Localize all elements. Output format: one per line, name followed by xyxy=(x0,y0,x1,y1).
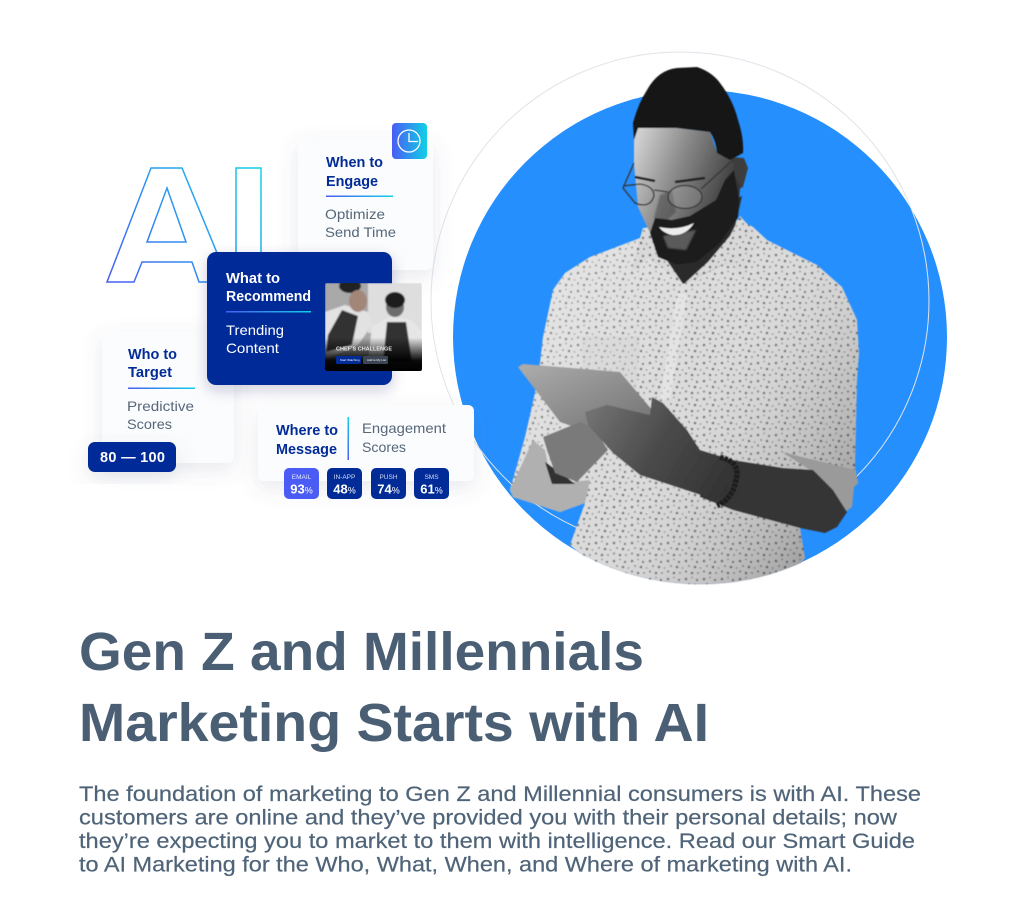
description paragraph: they’re expecting you to market to them with intelligence. Read our Smart Guide xyxy=(79,830,915,853)
heading: What to xyxy=(226,271,280,287)
channel tile: email xyxy=(284,468,319,499)
card: who to target xyxy=(102,331,234,463)
body line two: Scores xyxy=(127,416,172,432)
channel tile: sms: SMS xyxy=(424,474,439,481)
left forearm and cuff xyxy=(510,440,590,512)
lens right xyxy=(668,186,702,208)
content thumbnail: chef's challenge xyxy=(325,279,422,371)
description paragraph: The foundation of marketing to Gen Z and Millennial consumers is with AI. These xyxy=(79,783,921,806)
channel tile: in-app: IN-APP xyxy=(334,474,355,481)
left chef xyxy=(325,305,372,360)
card: where to message xyxy=(258,405,474,481)
heading line two: Target xyxy=(128,365,172,381)
card: what to recommend xyxy=(207,252,392,385)
channel tile: in-app xyxy=(327,468,362,499)
lens left xyxy=(623,163,654,205)
description paragraph: to AI Marketing for the Who, What, When, and Where of marketing with AI. xyxy=(79,854,852,876)
card background xyxy=(102,331,234,463)
button: add to my list: Add to My List xyxy=(367,358,386,362)
tablet xyxy=(518,364,664,436)
placket xyxy=(660,293,687,400)
chin highlight xyxy=(663,230,696,250)
thumbnail title: CHEF’S CHALLENGE xyxy=(336,346,392,352)
icon: clock xyxy=(392,123,427,159)
body line two: Content xyxy=(226,340,279,356)
face xyxy=(634,128,740,265)
thin outline circle xyxy=(431,52,929,550)
body: Engagement xyxy=(362,420,446,436)
right collar xyxy=(685,216,760,283)
AI outline lettering xyxy=(107,168,261,282)
bracelet xyxy=(717,457,737,506)
beard xyxy=(650,170,739,265)
channel tile: sms: 61% xyxy=(420,482,443,496)
hair xyxy=(633,67,743,160)
letter A xyxy=(107,168,229,282)
nose shadow xyxy=(654,190,676,222)
letter I xyxy=(236,168,261,282)
blue circle backdrop xyxy=(453,90,947,584)
bottom fade xyxy=(325,338,422,371)
card: when to engage xyxy=(298,138,433,270)
channel tile: push xyxy=(371,468,406,499)
body: Trending xyxy=(226,322,284,338)
heading: Who to xyxy=(128,347,177,363)
temple arm xyxy=(654,160,733,192)
score range badge: 80 — 100 xyxy=(100,450,165,466)
body line two: Scores xyxy=(362,439,406,455)
glasses xyxy=(623,160,733,208)
card background xyxy=(298,138,433,270)
cuff on right sleeve xyxy=(782,452,858,512)
right hand xyxy=(585,397,728,497)
card background xyxy=(207,252,392,385)
title line one: Gen Z and Millennials xyxy=(79,622,644,682)
score range badge xyxy=(88,442,176,472)
heading line two: Recommend xyxy=(226,289,311,305)
channel tile: email: EMAIL xyxy=(292,474,312,481)
shirt xyxy=(510,220,859,590)
ear xyxy=(728,157,748,191)
channel tile: push: 74% xyxy=(377,482,400,496)
photo background xyxy=(325,279,422,371)
body: Predictive xyxy=(127,398,194,414)
title xyxy=(79,622,709,753)
button: start watching: Start Watching xyxy=(340,358,360,362)
heading: When to xyxy=(326,155,383,171)
chest pocket xyxy=(583,336,639,386)
description paragraph xyxy=(79,783,921,876)
brows xyxy=(635,177,705,182)
channel tile: sms xyxy=(414,468,449,499)
heading line two: Engage xyxy=(326,174,378,190)
card background xyxy=(258,405,474,481)
forearm xyxy=(700,450,847,533)
photo: man holding tablet xyxy=(510,67,859,590)
description paragraph: customers are online and they’ve provided you with their personal details; now xyxy=(79,806,898,830)
heading line two: Message xyxy=(276,442,337,458)
channel tile: push: PUSH xyxy=(379,474,398,481)
channel tile: email: 93% xyxy=(290,482,313,496)
left collar xyxy=(630,228,683,284)
channel tile: in-app: 48% xyxy=(333,482,356,496)
left hand xyxy=(543,422,608,482)
title line two: Marketing Starts with AI xyxy=(79,693,709,753)
neck xyxy=(652,196,742,284)
smile xyxy=(659,223,694,235)
body: Optimize xyxy=(325,206,385,222)
right chef xyxy=(368,318,422,358)
wrist shadow xyxy=(545,462,575,484)
heading: Where to xyxy=(276,423,338,439)
body line two: Send Time xyxy=(325,224,396,240)
